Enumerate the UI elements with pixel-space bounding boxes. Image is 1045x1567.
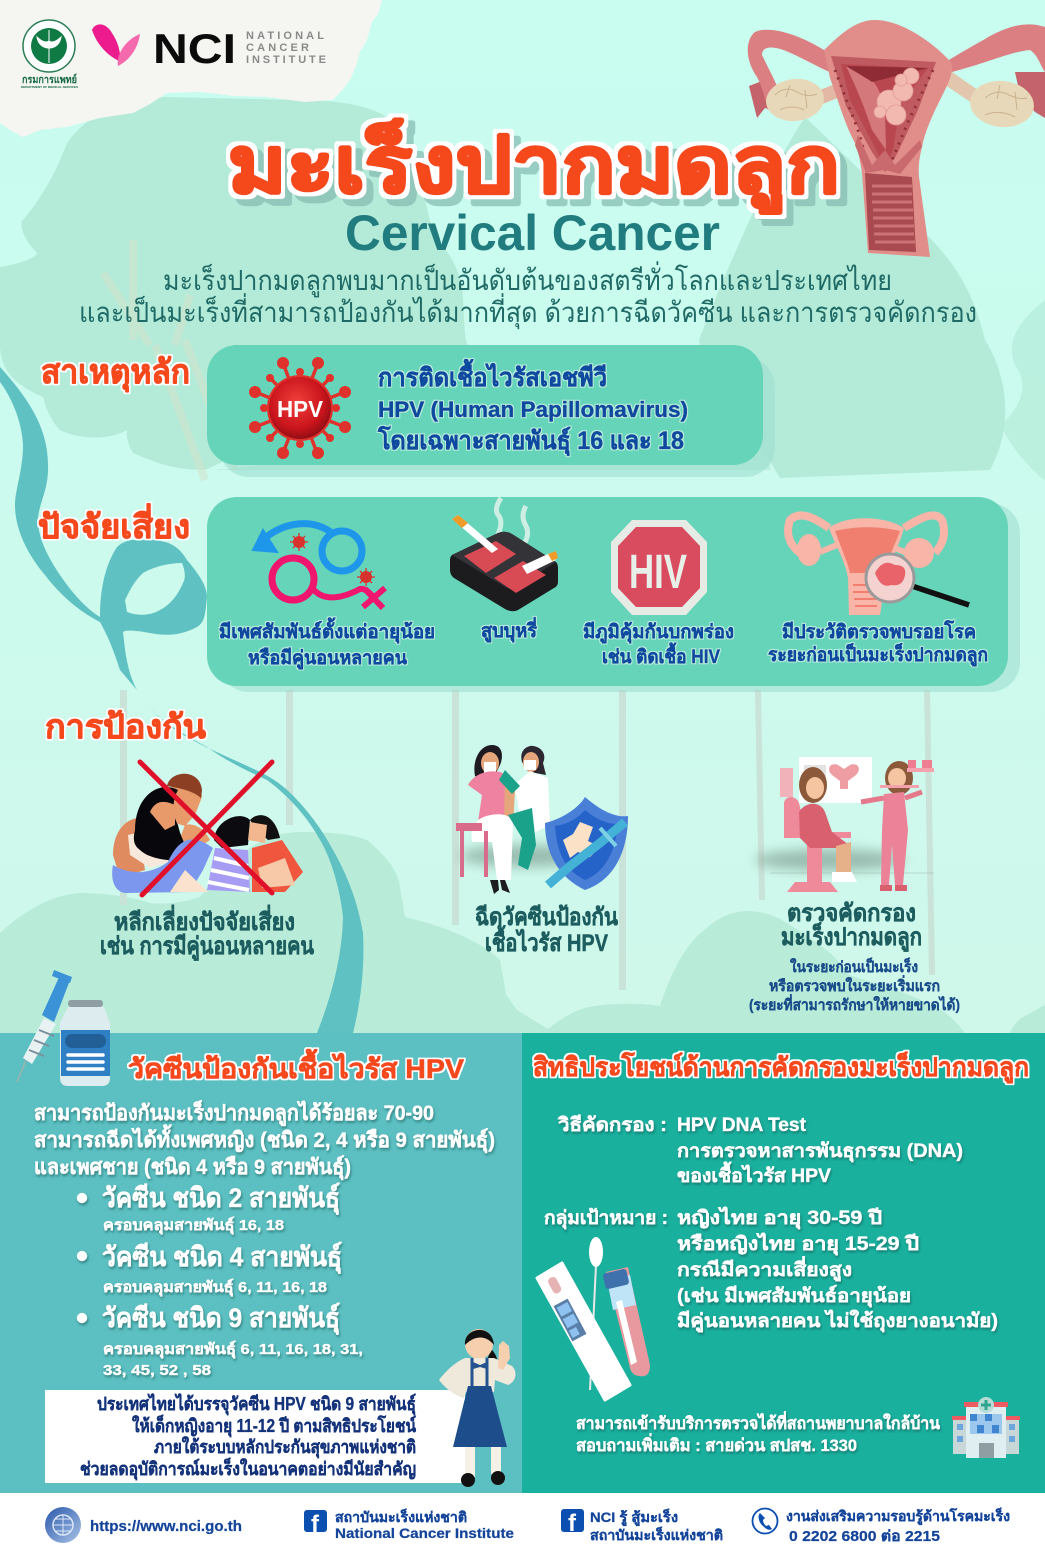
risk captions bbox=[219, 617, 988, 670]
facebook: NCI: สถาบันมะเร็งแห่งชาติ bbox=[590, 1526, 723, 1543]
phone contact bbox=[752, 1507, 1010, 1545]
vaccine body text: วัคซีน ชนิด 4 สายพันธุ์ bbox=[102, 1241, 342, 1274]
logo: department of medical services: กรมการแพทย์ bbox=[22, 73, 77, 86]
screening body text: กรณีมีความเสี่ยงสูง bbox=[677, 1256, 852, 1282]
screening body text: การตรวจหาสารพันธุกรรม (DNA) bbox=[677, 1141, 963, 1163]
heading: HPV vaccine: วัคซีนป้องกันเชื้อไวรัส HPV bbox=[128, 1048, 464, 1084]
icon: HPV virus: HPV bbox=[277, 396, 324, 422]
vaccine body text: ครอบคลุมสายพันธุ์ 6, 11, 16, 18 bbox=[103, 1278, 327, 1297]
phone contact: 0 2202 6800 ต่อ 2215 bbox=[789, 1528, 940, 1545]
vaccine body text: สามารถฉีดได้ทั้งเพศหญิง (ชนิด 2, 4 หรือ 9 สายพันธุ์) bbox=[34, 1124, 495, 1154]
logo: NCI: NCI bbox=[153, 25, 236, 72]
icon: ashtray and cigarettes bbox=[450, 498, 558, 611]
screening body text bbox=[544, 1114, 998, 1333]
heading: prevention: การป้องกัน bbox=[45, 708, 206, 745]
vaccine body text: ครอบคลุมสายพันธุ์ 16, 18 bbox=[103, 1216, 284, 1235]
icon: syringe and vial bbox=[17, 970, 110, 1086]
service information: สอบถามเพิ่มเติม : สายด่วน สปสช. 1330 bbox=[576, 1433, 857, 1455]
service information: สามารถเข้ารับบริการตรวจได้ที่สถานพยาบาลใกล้บ้าน bbox=[576, 1411, 940, 1433]
logo: department of medical services: DEPARTMENT OF MEDICAL SERVICES bbox=[21, 85, 78, 89]
logo: NCI bbox=[92, 24, 326, 72]
panel: risk factors bbox=[207, 497, 1020, 692]
footer bbox=[0, 1493, 1045, 1567]
facebook: National Cancer Institute bbox=[304, 1508, 514, 1541]
risk captions: หรือมีคู่นอนหลายคน bbox=[248, 647, 407, 670]
website bbox=[45, 1507, 242, 1543]
intro text: และเป็นมะเร็งที่สามารถป้องกันได้มากที่สุด ด้วยการฉีดวัคซีน และการตรวจคัดกรอง bbox=[79, 293, 977, 330]
panel: screening benefits bbox=[522, 1033, 1045, 1493]
caption: vaccinate: ฉีดวัคซีนป้องกัน bbox=[475, 904, 619, 931]
icon: HPV test kit bbox=[537, 1237, 650, 1400]
screening body text: วิธีคัดกรอง : bbox=[558, 1114, 667, 1136]
logo: department of medical services bbox=[21, 20, 78, 89]
illustration: couples crossed out bbox=[112, 762, 303, 895]
title: มะเร็งปากมดลูก bbox=[228, 119, 840, 214]
facebook: National Cancer Institute: f bbox=[311, 1511, 320, 1538]
illustration: vaccination bbox=[456, 745, 628, 894]
illustration: screening consultation bbox=[755, 757, 934, 892]
callout: Thailand vaccine programme: ภายใต้ระบบหลักประกันสุขภาพแห่งชาติ bbox=[154, 1436, 416, 1459]
facebook: NCI: f bbox=[568, 1510, 577, 1537]
icon: gender symbols bbox=[253, 524, 385, 608]
logo: NCI: INSTITUTE bbox=[246, 54, 326, 66]
phone contact: งานส่งเสริมความรอบรู้ด้านโรคมะเร็ง bbox=[786, 1507, 1010, 1525]
vaccine body text: ครอบคลุมสายพันธุ์ 6, 11, 16, 18, 31, bbox=[103, 1340, 363, 1359]
screening body text: HPV DNA Test bbox=[677, 1115, 807, 1136]
callout: Thailand vaccine programme: ประเทศไทยได้บรรจุวัคซีน HPV ชนิด 9 สายพันธุ์ bbox=[97, 1393, 416, 1416]
panel: main cause bbox=[207, 345, 775, 477]
heading: risk factors: ปัจจัยเสี่ยง bbox=[38, 503, 190, 545]
vaccine body text: และเพศชาย (ชนิด 4 หรือ 9 สายพันธุ์) bbox=[34, 1155, 351, 1181]
caption: screening: ตรวจคัดกรอง bbox=[787, 900, 916, 927]
main cause text: การติดเชื้อไวรัสเอชพีวี bbox=[378, 358, 607, 392]
logo: NCI: NATIONAL bbox=[246, 30, 324, 42]
icon: uterus with magnifier bbox=[788, 515, 969, 615]
vaccine body text: วัคซีน ชนิด 9 สายพันธุ์ bbox=[102, 1302, 340, 1335]
risk captions: มีเพศสัมพันธ์ตั้งแต่อายุน้อย bbox=[219, 617, 435, 644]
caption: avoid risk factors: หลีกเลี่ยงปัจจัยเสี่ยง bbox=[114, 904, 295, 936]
callout: Thailand vaccine programme bbox=[45, 1390, 465, 1483]
risk captions: มีภูมิคุ้มกันบกพร่อง bbox=[583, 621, 734, 644]
facebook: NCI bbox=[561, 1508, 723, 1543]
decorative awareness ribbon bbox=[0, 367, 363, 1033]
caption: screening: มะเร็งปากมดลูก bbox=[781, 922, 922, 952]
icon: HIV stop sign: HIV bbox=[629, 546, 687, 599]
facebook: National Cancer Institute: National Cancer Institute bbox=[335, 1525, 514, 1541]
screening body text: หญิงไทย อายุ 30-59 ปี bbox=[677, 1206, 882, 1230]
caption: avoid risk factors bbox=[100, 904, 314, 961]
callout: Thailand vaccine programme: ช่วยลดอุบัติการณ์มะเร็งในอนาคตอย่างมีนัยสำคัญ bbox=[80, 1457, 416, 1481]
screening body text: ของเชื้อไวรัส HPV bbox=[677, 1161, 831, 1187]
logo: NCI: CANCER bbox=[246, 42, 309, 54]
icon: hospital bbox=[952, 1397, 1020, 1458]
risk captions: สูบบุหรี่ bbox=[481, 617, 538, 643]
facebook: NCI: NCI รู้ สู้มะเร็ง bbox=[590, 1508, 678, 1526]
main cause text bbox=[377, 358, 688, 457]
caption: screening: หรือตรวจพบในระยะเริ่มแรก bbox=[769, 975, 940, 995]
heading: screening benefits: สิทธิประโยชน์ด้านการคัดกรองมะเร็งปากมดลูก bbox=[533, 1051, 1029, 1084]
caption: avoid risk factors: เช่น การมีคู่นอนหลายคน bbox=[100, 933, 314, 961]
intro text: มะเร็งปากมดลูกพบมากเป็นอันดับต้นของสตรีทั่วโลกและประเทศไทย bbox=[163, 261, 892, 298]
facebook: National Cancer Institute: สถาบันมะเร็งแห่งชาติ bbox=[335, 1508, 467, 1525]
service information bbox=[576, 1411, 940, 1455]
icon: HIV stop sign bbox=[611, 520, 707, 615]
screening body text: (เช่น มีเพศสัมพันธ์อายุน้อย bbox=[677, 1285, 911, 1308]
caption: vaccinate: เชื้อไวรัส HPV bbox=[485, 924, 608, 957]
torn paper header bbox=[0, 0, 382, 137]
illustration: uterus anatomy bbox=[748, 20, 1045, 257]
subtitle: Cervical Cancer bbox=[345, 205, 720, 261]
vaccine body text: 33, 45, 52 , 58 bbox=[103, 1362, 211, 1379]
caption: screening bbox=[749, 900, 960, 1014]
caption: screening: ในระยะก่อนเป็นมะเร็ง bbox=[790, 957, 918, 976]
intro text bbox=[79, 261, 977, 330]
screening body text: กลุ่มเป้าหมาย : bbox=[544, 1207, 668, 1230]
screening body text: มีคู่นอนหลายคน ไม่ใช้ถุงยางอนามัย) bbox=[677, 1309, 998, 1333]
main cause text: โดยเฉพาะสายพันธุ์ 16 และ 18 bbox=[377, 425, 684, 457]
heading: main cause: สาเหตุหลัก bbox=[41, 353, 190, 393]
vaccine body text: สามารถป้องกันมะเร็งปากมดลูกได้ร้อยละ 70-90 bbox=[34, 1099, 434, 1127]
caption: vaccinate bbox=[475, 904, 619, 957]
website: https://www.nci.go.th bbox=[90, 1518, 242, 1535]
caption: screening: (ระยะที่สามารถรักษาให้หายขาดได้) bbox=[749, 994, 960, 1014]
risk captions: เช่น ติดเชื้อ HIV bbox=[602, 642, 720, 668]
callout: Thailand vaccine programme: ให้เด็กหญิงอายุ 11-12 ปี ตามสิทธิประโยชน์ bbox=[132, 1414, 417, 1438]
main cause text: HPV (Human Papillomavirus) bbox=[378, 397, 688, 422]
vaccine body text bbox=[34, 1099, 495, 1379]
illustration: school girl bbox=[439, 1329, 515, 1487]
risk captions: มีประวัติตรวจพบรอยโรค bbox=[782, 620, 976, 643]
screening body text: หรือหญิงไทย อายุ 15-29 ปี bbox=[677, 1232, 919, 1256]
vaccine body text: วัคซีน ชนิด 2 สายพันธุ์ bbox=[102, 1182, 340, 1215]
risk captions: ระยะก่อนเป็นมะเร็งปากมดลูก bbox=[768, 642, 988, 667]
panel: HPV vaccine bbox=[0, 970, 522, 1493]
icon: HPV virus bbox=[249, 357, 351, 459]
